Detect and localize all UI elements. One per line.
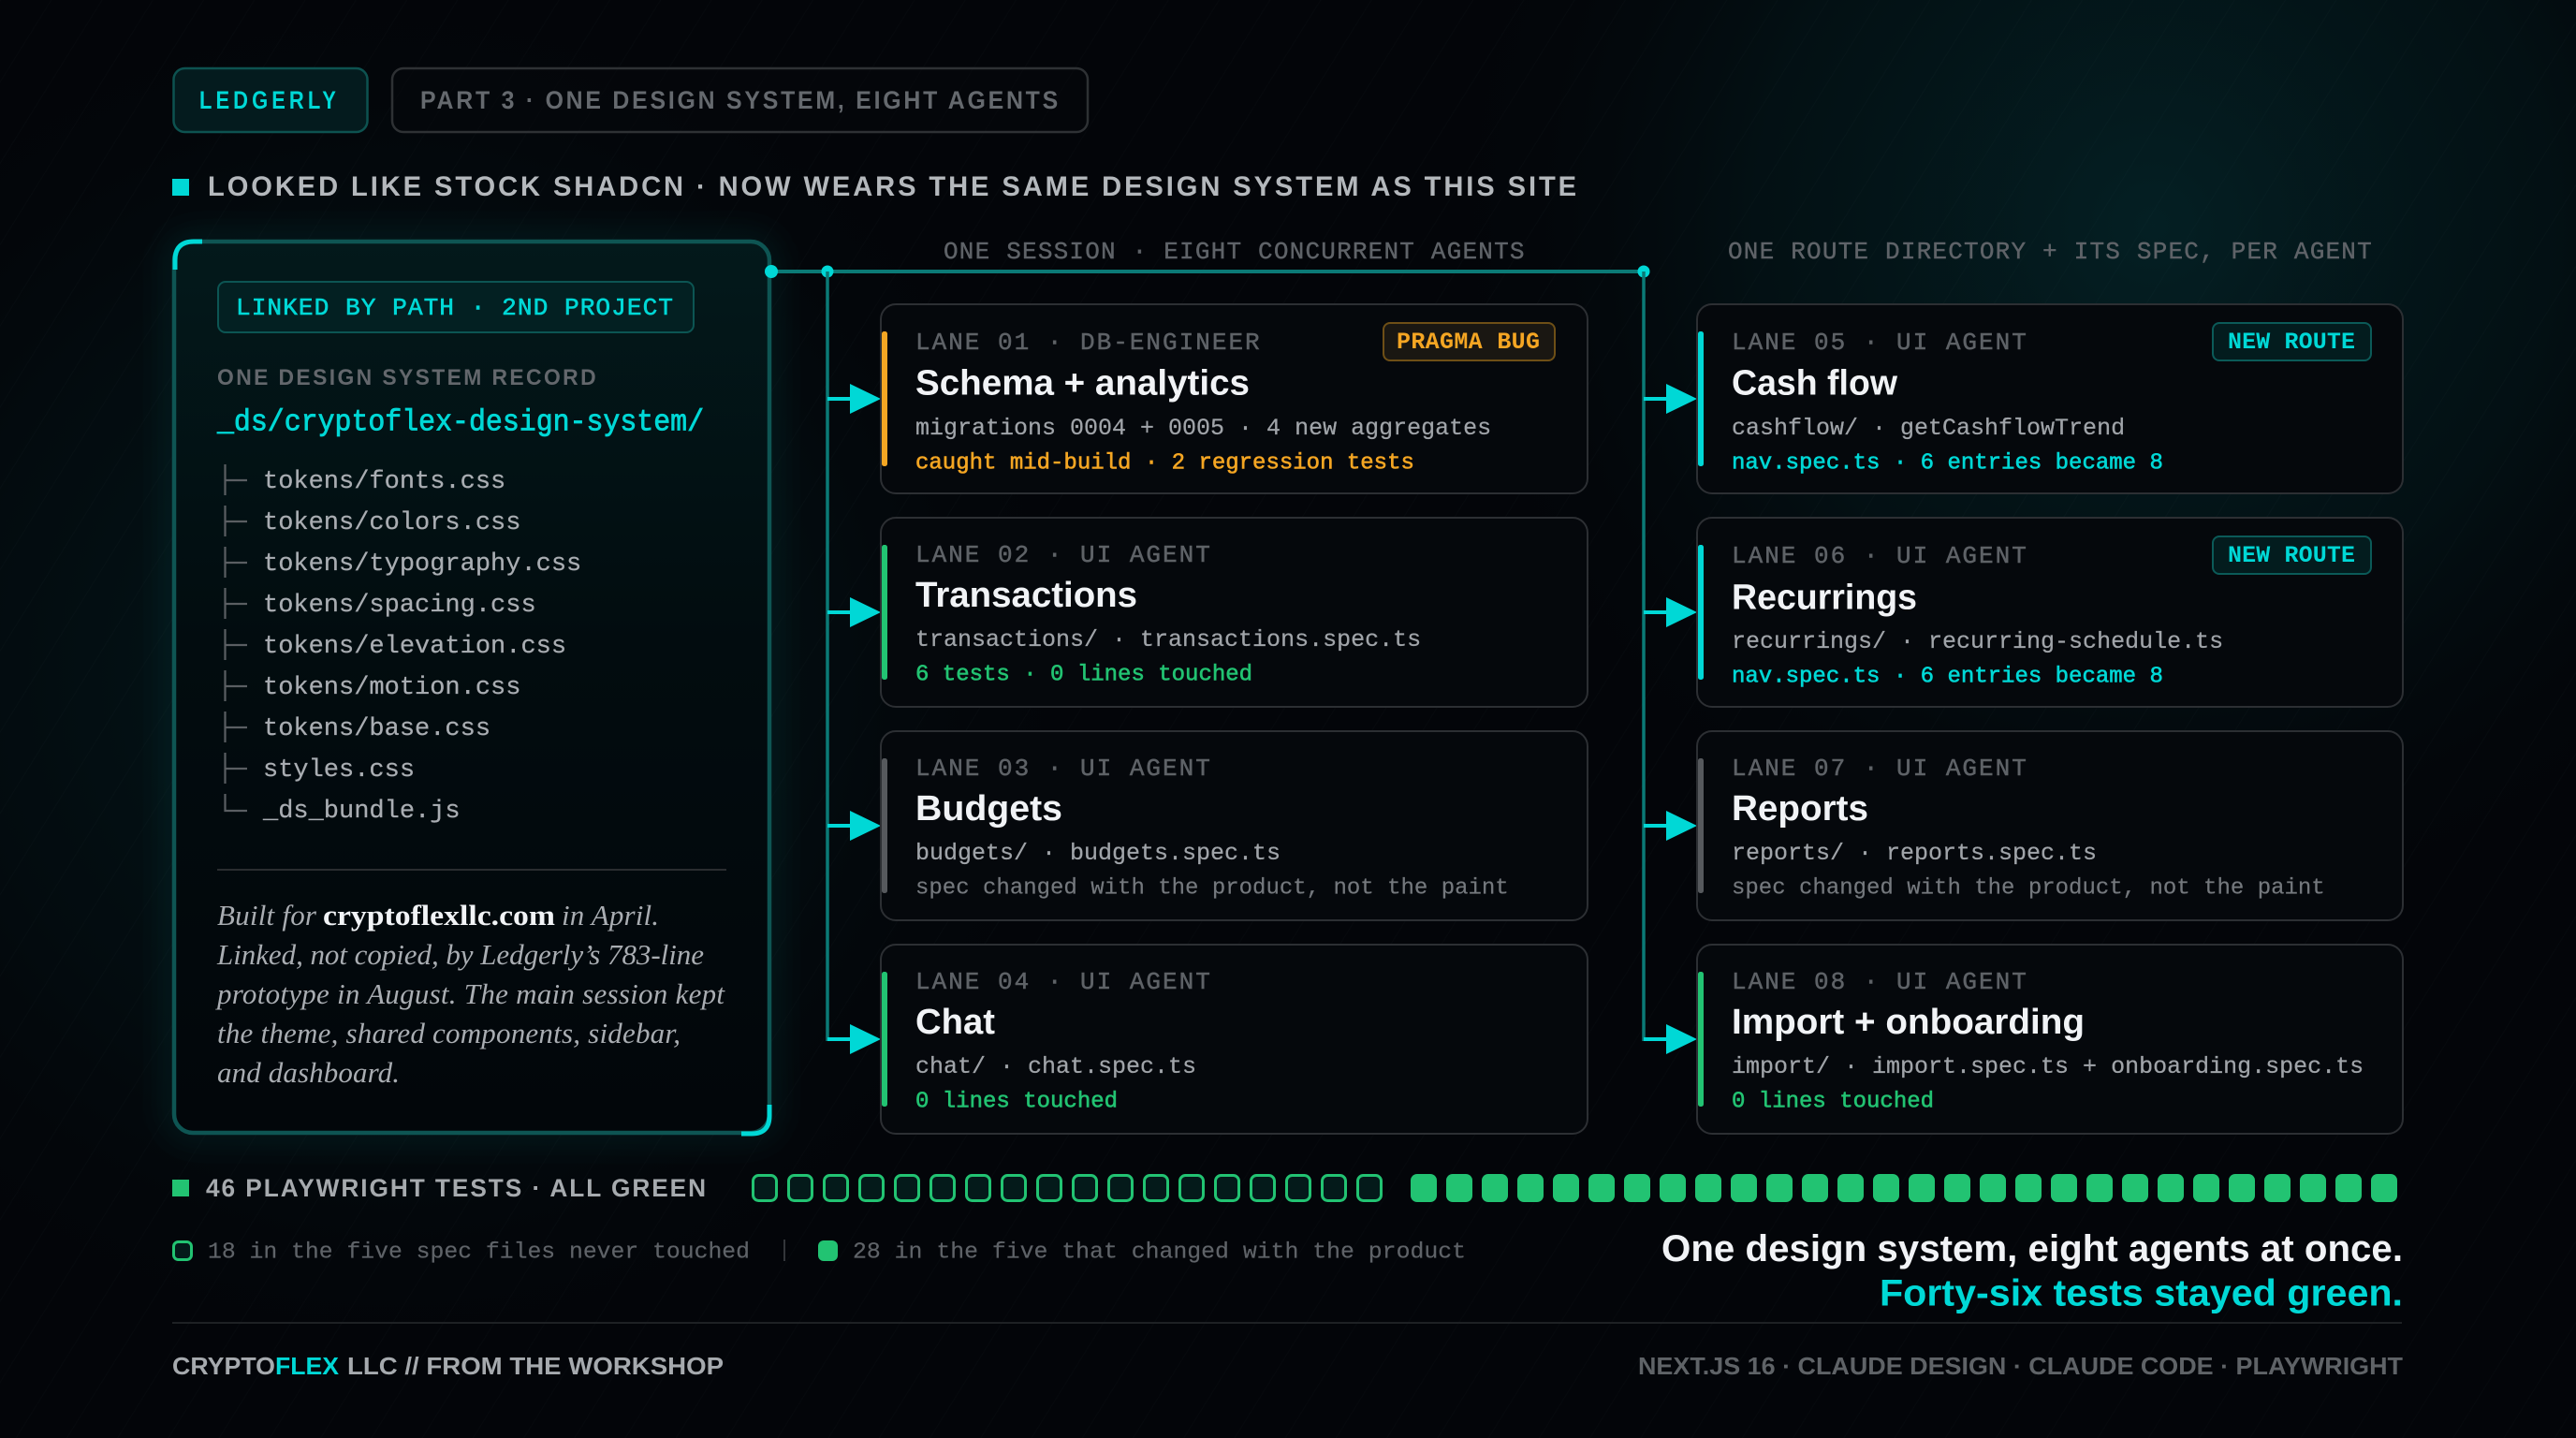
panel: lane 07 — [1697, 731, 2403, 920]
panel: lane 07: reports/ · reports.spec.ts — [1732, 840, 2097, 867]
corner accent: top left — [175, 242, 202, 270]
legend: untouched and changed specs: 28 in the five that changed with the product — [853, 1240, 1466, 1266]
file tree: _ds_bundle.js — [262, 798, 461, 826]
description: the theme, shared components, sidebar, — [217, 1017, 681, 1049]
panel: lane 05: cashflow/ · getCashflowTrend — [1732, 415, 2125, 442]
legend: untouched and changed specs: 18 in the five spec files never touched — [208, 1240, 750, 1266]
badge: new route — [2213, 536, 2371, 574]
description — [215, 899, 725, 1089]
badge: new route — [2213, 323, 2371, 360]
panel: lane 06 — [1697, 518, 2403, 707]
panel: lane 05: nav.spec.ts · 6 entries became 8 — [1732, 451, 2163, 476]
panel: lane 08: 0 lines touched — [1732, 1090, 1934, 1114]
badge: new route: NEW ROUTE — [2228, 329, 2355, 356]
legend: untouched and changed specs — [174, 1240, 1466, 1266]
panel: lane 05 — [1697, 304, 2403, 493]
file tree — [225, 464, 581, 826]
file tree: tokens/colors.css — [263, 509, 520, 537]
panel: lane 06: nav.spec.ts · 6 entries became 8 — [1732, 665, 2163, 689]
panel: lane 08: Import + onboarding — [1732, 1003, 2085, 1042]
panel: lane 01: Schema + analytics — [915, 363, 1250, 403]
chip: part 3 — [392, 68, 1088, 132]
connector: trunk from panel — [765, 265, 1649, 278]
panel: lane 08 — [1697, 945, 2403, 1134]
badge: pragma bug — [1383, 323, 1555, 360]
description: Built for — [217, 899, 317, 932]
closing statement: Forty-six tests stayed green. — [1880, 1273, 2403, 1314]
description: Linked, not copied, by Ledgerly’s 783-line — [216, 938, 704, 971]
footer brand: FLEX — [275, 1352, 340, 1380]
panel: lane 05: LANE 05 · UI AGENT — [1732, 329, 2028, 357]
panel: lane 07: Reports — [1732, 789, 1868, 829]
panel: lane 04: Chat — [915, 1003, 995, 1042]
panel: lane 01: LANE 01 · DB-ENGINEER — [915, 329, 1262, 357]
file tree: tokens/elevation.css — [263, 633, 566, 661]
panel: lane 02: Transactions — [915, 576, 1137, 615]
connector: left bus with arrows — [827, 271, 881, 1054]
file tree: tokens/fonts.css — [263, 468, 505, 496]
panel: lane 08: import/ · import.spec.ts + onboarding.spec.ts — [1732, 1053, 2364, 1080]
description: in April. — [562, 899, 659, 932]
chip: ledgerly: LEDGERLY — [199, 86, 340, 114]
panel: lane 02: LANE 02 · UI AGENT — [915, 541, 1212, 569]
panel: lane 03: budgets/ · budgets.spec.ts — [915, 840, 1281, 867]
column header: session: ONE SESSION · EIGHT CONCURRENT AGENTS — [944, 238, 1526, 266]
path: design system directory: _ds/cryptoflex-design-system/ — [216, 404, 704, 440]
panel: lane 02: 6 tests · 0 lines touched — [915, 663, 1252, 687]
badge: linked by path — [218, 282, 694, 332]
panel: lane 04: chat/ · chat.spec.ts — [915, 1053, 1196, 1080]
badge: new route: NEW ROUTE — [2228, 542, 2355, 569]
main heading: LOOKED LIKE STOCK SHADCN · NOW WEARS THE SAME DESIGN SYSTEM AS THIS SITE — [208, 171, 1579, 202]
panel: lane 03: LANE 03 · UI AGENT — [915, 755, 1212, 783]
file tree: tokens/spacing.css — [263, 592, 536, 620]
footer brand: CRYPTO — [172, 1352, 275, 1380]
panel: lane 05: Cash flow — [1732, 363, 1897, 403]
description: prototype in August. The main session kept — [215, 977, 725, 1010]
panel: lane 08: LANE 08 · UI AGENT — [1732, 968, 2028, 996]
chip: part 3: PART 3 · ONE DESIGN SYSTEM, EIGHT AGENTS — [420, 86, 1061, 114]
panel: lane 01 — [881, 304, 1588, 493]
label: one design system record: ONE DESIGN SYSTEM RECORD — [217, 365, 598, 390]
test pills: 28 changed (filled) — [1411, 1174, 2397, 1202]
panel: lane 06: Recurrings — [1732, 579, 1917, 618]
test pills: 18 untouched (hollow) — [753, 1176, 1382, 1200]
panel: lane 07: LANE 07 · UI AGENT — [1732, 755, 2028, 783]
panel: lane 02 — [881, 518, 1588, 707]
description: cryptoflexllc.com — [323, 899, 555, 932]
badge: pragma bug: PRAGMA BUG — [1397, 329, 1540, 356]
panel: lane 06: LANE 06 · UI AGENT — [1732, 542, 2028, 570]
file tree: tokens/typography.css — [263, 550, 581, 579]
panel: lane 01: migrations 0004 + 0005 · 4 new aggregates — [915, 415, 1491, 442]
panel: lane 04 — [881, 945, 1588, 1134]
panel: lane 06: recurrings/ · recurring-schedule.ts — [1732, 628, 2223, 655]
panel: lane 04: LANE 04 · UI AGENT — [915, 968, 1212, 996]
tests heading: 46 PLAYWRIGHT TESTS · ALL GREEN — [206, 1174, 708, 1202]
closing statement — [1661, 1228, 2403, 1314]
connector: right bus with arrows — [1644, 271, 1697, 1054]
panel: lane 03: spec changed with the product, not the paint — [915, 876, 1509, 901]
description: and dashboard. — [217, 1056, 400, 1089]
panel: lane 07: spec changed with the product, not the paint — [1732, 876, 2325, 901]
panel: lane 01: caught mid-build · 2 regression tests — [915, 451, 1414, 476]
footer brand — [172, 1352, 724, 1380]
panel: lane 02: transactions/ · transactions.spec.ts — [915, 626, 1421, 653]
column header: route directory: ONE ROUTE DIRECTORY + ITS SPEC, PER AGENT — [1728, 238, 2373, 266]
file tree: tokens/motion.css — [263, 674, 520, 702]
panel: lane 03: Budgets — [915, 789, 1062, 829]
footer stack: NEXT.JS 16 · CLAUDE DESIGN · CLAUDE CODE · PLAYWRIGHT — [1638, 1352, 2403, 1380]
chip: ledgerly — [174, 68, 367, 132]
corner accent: bottom right — [741, 1105, 769, 1134]
badge: linked by path: LINKED BY PATH · 2ND PROJECT — [236, 294, 674, 322]
file tree: styles.css — [263, 756, 415, 785]
panel: design system record — [174, 242, 769, 1134]
file tree: tokens/base.css — [263, 715, 490, 743]
closing statement: One design system, eight agents at once. — [1661, 1228, 2403, 1269]
footer brand: LLC // FROM THE WORKSHOP — [347, 1352, 724, 1380]
panel: lane 04: 0 lines touched — [915, 1090, 1118, 1114]
panel: lane 03 — [881, 731, 1588, 920]
